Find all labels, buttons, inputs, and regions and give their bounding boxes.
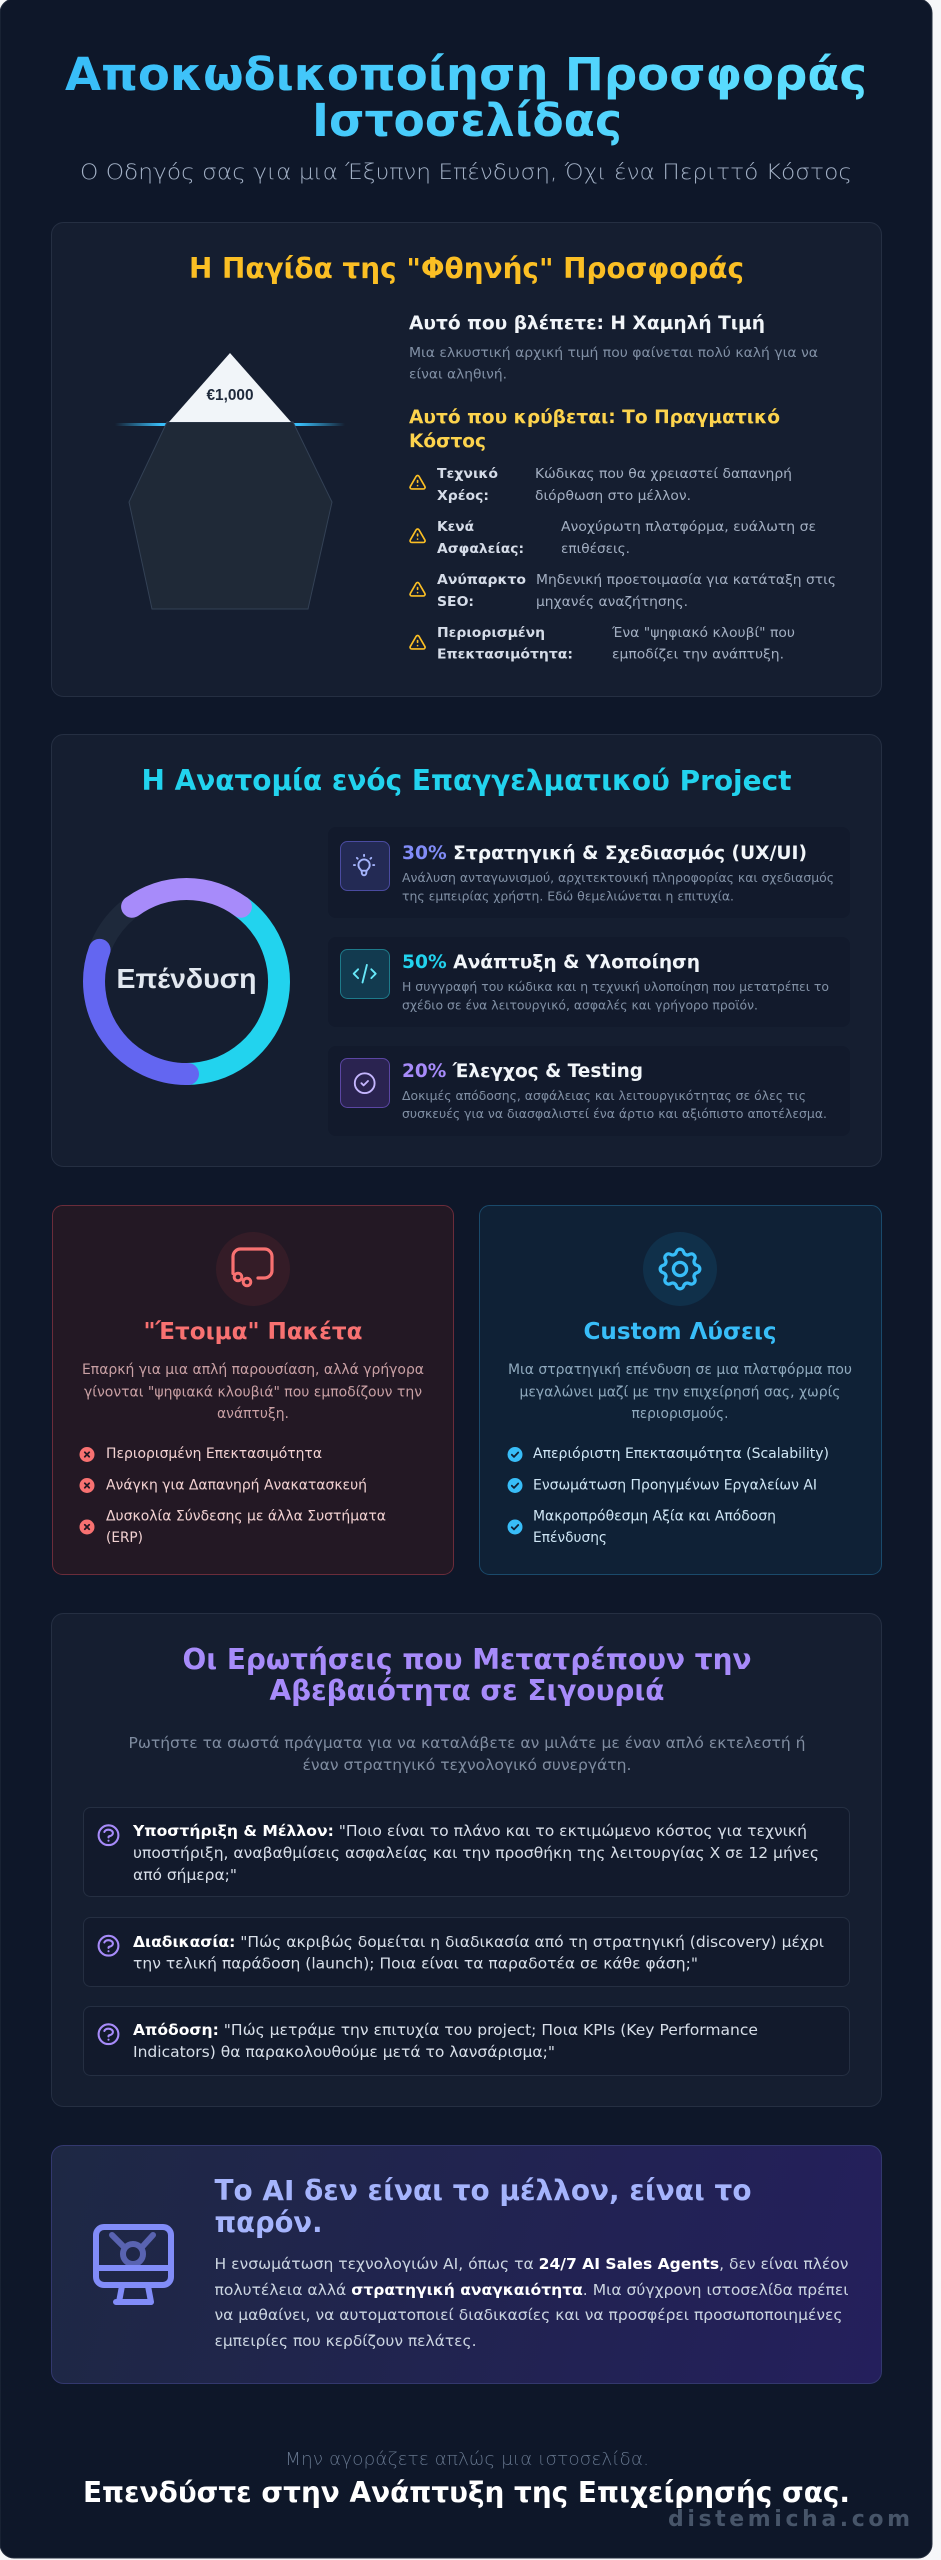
donut chart: Επένδυση (116, 963, 256, 994)
description: Επαρκή για μια απλή παρουσίαση, αλλά γρήγορα (82, 1362, 424, 1378)
list item: limited scalability: Επεκτασιμότητα: (437, 646, 573, 662)
question: support and future: υποστήριξη, αναβαθμίσεις ασφαλείας και την προσθήκη της λειτουργίας Χ σε 12 μήνες (133, 1844, 819, 1862)
text: what you see: Μια ελκυστική αρχική τιμή που φαίνεται πολύ καλή για να (409, 345, 818, 361)
body text: πολυτέλεια αλλά στρατηγική αναγκαιότητα . Μια σύγχρονη ιστοσελίδα πρέπει (214, 2281, 848, 2299)
panel: questions (52, 1614, 882, 2106)
question: support and future (84, 1808, 850, 1896)
heading: AI: Το AI δεν είναι το μέλλον, είναι το (214, 2174, 752, 2207)
list item: technical debt: Χρέος: (437, 488, 489, 504)
description: ανάπτυξη. (217, 1406, 289, 1422)
list item: technical debt (410, 466, 792, 504)
question: process: την τελική παράδοση (launch); Ποια είναι τα παραδοτέα σε κάθε φάση;" (133, 1954, 698, 1972)
description: Μια στρατηγική επένδυση σε μια πλατφόρμα που (508, 1362, 852, 1378)
description (82, 1362, 424, 1422)
intro text (128, 1734, 806, 1774)
heading: custom: Custom Λύσεις (584, 1319, 776, 1345)
description (508, 1362, 852, 1422)
heading: AI: παρόν. (214, 2206, 322, 2239)
row: 50% development (328, 937, 850, 1027)
list item: security gaps (410, 519, 816, 557)
panel: custom solutions (480, 1206, 882, 1574)
heading: anatomy: Η Ανατομία ενός Επαγγελματικού Project (142, 764, 792, 797)
panel: AI callout (52, 2146, 882, 2384)
list item: limited scalability: Περιορισμένη (437, 625, 545, 641)
list: drawbacks: (ERP) (106, 1530, 143, 1546)
list: drawbacks: Δυσκολία Σύνδεσης με άλλα Συστήματα (106, 1508, 386, 1524)
text: what you see: είναι αληθινή. (409, 366, 507, 382)
list: benefits: Ενσωμάτωση Προηγμένων Εργαλείων AI (533, 1478, 817, 1494)
row: 20% testing: 20% Έλεγχος & Testing (402, 1061, 643, 1082)
subtitle: Ο Οδηγός σας για μια Έξυπνη Επένδυση, Όχι ένα Περιττό Κόστος (80, 160, 852, 185)
row: 30% strategy (328, 827, 850, 918)
body text: εμπειρίες που κερδίζουν πελάτες. (214, 2332, 476, 2350)
description: μεγαλώνει μαζί με την επιχείρησή σας, χωρίς (520, 1384, 840, 1400)
watermark: distemicha.com (668, 2507, 910, 2532)
list item: missing SEO: μηχανές αναζήτησης. (536, 594, 688, 610)
question: support and future: από σήμερα;" (133, 1866, 237, 1884)
title: Αποκωδικοποίηση Προσφοράς (65, 48, 867, 101)
icon: broken cage (216, 1232, 290, 1306)
text: what you see: Αυτό που βλέπετε: Η Χαμηλή Τιμή (409, 313, 765, 334)
list: benefits: Μακροπρόθεσμη Αξία και Απόδοση (533, 1508, 776, 1524)
panel: ready-made packages (52, 1206, 454, 1574)
list item: technical debt: διόρθωση στο μέλλον. (535, 488, 691, 504)
text: what is hidden: Κόστος (409, 431, 486, 452)
text: what is hidden: Αυτό που κρύβεται: Το Πραγματικό (409, 407, 780, 428)
text: what is hidden (409, 407, 780, 452)
icon: AI monitor (96, 2227, 171, 2302)
list: benefits (508, 1446, 829, 1546)
row: 30% strategy: 30% Στρατηγική & Σχεδιασμός (UX/UI) (402, 843, 807, 864)
footer (83, 2450, 850, 2509)
heading: trap: Η Παγίδα της "Φθηνής" Προσφοράς (189, 252, 744, 285)
question: performance: Απόδοση: "Πώς μετράμε την επιτυχία του project; Ποια KPIs (Key Performance (133, 2021, 758, 2039)
question: process: Διαδικασία: "Πώς ακριβώς δομείται η διαδικασία από τη στρατηγική (discovery) μέχρι (133, 1933, 824, 1951)
body text: να μαθαίνει, να αυτοματοποιεί διαδικασίες και να προσφέρει προσωποποιημένες (214, 2306, 842, 2324)
list: drawbacks: Ανάγκη για Δαπανηρή Ανακατασκευή (106, 1478, 367, 1494)
row: 20% testing: συσκευές για να διασφαλιστεί ένα άρτιο και αξιόπιστο αποτέλεσμα. (402, 1106, 827, 1121)
list: drawbacks: Περιορισμένη Επεκτασιμότητα (106, 1446, 322, 1462)
list item: missing SEO: Μηδενική προετοιμασία για κατάταξη στις (536, 572, 836, 588)
intro text: Ρωτήστε τα σωστά πράγματα για να καταλάβετε αν μιλάτε με έναν απλό εκτελεστή ή (128, 1734, 806, 1752)
list item: technical debt: Τεχνικό (437, 466, 498, 482)
row: 30% strategy: Ανάλυση ανταγωνισμού, αρχιτεκτονική πληροφορίας και σχεδιασμός (402, 870, 834, 885)
list item: security gaps: Κενά (437, 519, 474, 535)
row: 50% development: σχέδιο σε ένα λειτουργικό, ασφαλές και γρήγορο προϊόν. (402, 998, 758, 1012)
question: support and future: Υποστήριξη & Μέλλον: "Ποιο είναι το πλάνο και το εκτιμώμενο κόστος για τεχνική (132, 1822, 807, 1840)
body text: Η ενσωμάτωση τεχνολογιών AI, όπως τα 24/7 AI Sales Agents , δεν είναι πλέον (214, 2255, 848, 2273)
heading: ready-made: "Έτοιμα" Πακέτα (144, 1319, 362, 1345)
heading: questions: Αβεβαιότητα σε Σιγουριά (270, 1674, 664, 1707)
icon: gear (643, 1232, 717, 1306)
list item: limited scalability (410, 625, 795, 662)
heading: questions: Οι Ερωτήσεις που Μετατρέπουν την (182, 1643, 752, 1676)
list: benefits: Απεριόριστη Επεκτασιμότητα (Scalability) (533, 1446, 829, 1462)
description: γίνονται "ψηφιακά κλουβιά" που εμποδίζουν την (84, 1384, 422, 1400)
panel: anatomy of a project (52, 734, 882, 1166)
row: 20% testing (328, 1046, 850, 1136)
title second line: Ιστοσελίδας (312, 94, 622, 147)
iceberg diagram (115, 353, 345, 609)
list item: technical debt: Κώδικας που θα χρειαστεί δαπανηρή (535, 466, 792, 482)
list item: security gaps: Ασφαλείας: (437, 541, 524, 557)
list item: missing SEO (410, 572, 836, 610)
row: 50% development: 50% Ανάπτυξη & Υλοποίηση (402, 952, 700, 973)
list: drawbacks (80, 1446, 386, 1546)
iceberg diagram: €1,000 (206, 387, 254, 404)
footer lead-in: Μην αγοράζετε απλώς μια ιστοσελίδα. (285, 2450, 649, 2470)
footer headline: Επενδύστε στην Ανάπτυξη της Επιχείρησής σας. (83, 2476, 850, 2509)
heading: AI (214, 2174, 752, 2239)
list item: limited scalability: Ένα "ψηφιακό κλουβί" που (611, 625, 795, 641)
heading: questions (182, 1643, 752, 1707)
list item: security gaps: επιθέσεις. (561, 541, 630, 557)
question: performance: Indicators) θα παρακολουθούμε μετά το λανσάρισμα;" (133, 2043, 555, 2061)
panel: the cheap offer trap (52, 222, 882, 696)
question: performance (84, 2006, 850, 2076)
list item: security gaps: Ανοχύρωτη πλατφόρμα, ευάλωτη σε (561, 519, 816, 535)
text: what you see (409, 313, 818, 382)
question: process (84, 1918, 850, 1986)
donut chart (94, 889, 279, 1074)
list item: missing SEO: Ανύπαρκτο (437, 572, 526, 588)
row: 30% strategy: της εμπειρίας χρήστη. Εδώ θεμελιώνεται η επιτυχία. (402, 888, 734, 904)
intro text: έναν στρατηγικό τεχνολογικό συνεργάτη. (302, 1756, 632, 1774)
list item: limited scalability: εμποδίζει την ανάπτυξη. (612, 646, 784, 662)
body text (214, 2255, 848, 2350)
list item: missing SEO: SEO: (437, 595, 474, 610)
header (65, 48, 867, 185)
row: 20% testing: Δοκιμές απόδοσης, ασφάλειας και λειτουργικότητας σε όλες τις (402, 1088, 806, 1103)
list: benefits: Επένδυσης (533, 1530, 607, 1546)
description: περιορισμούς. (632, 1406, 728, 1422)
row: 50% development: Η συγγραφή του κώδικα και η τεχνική υλοποίηση που μετατρέπει το (402, 979, 829, 994)
